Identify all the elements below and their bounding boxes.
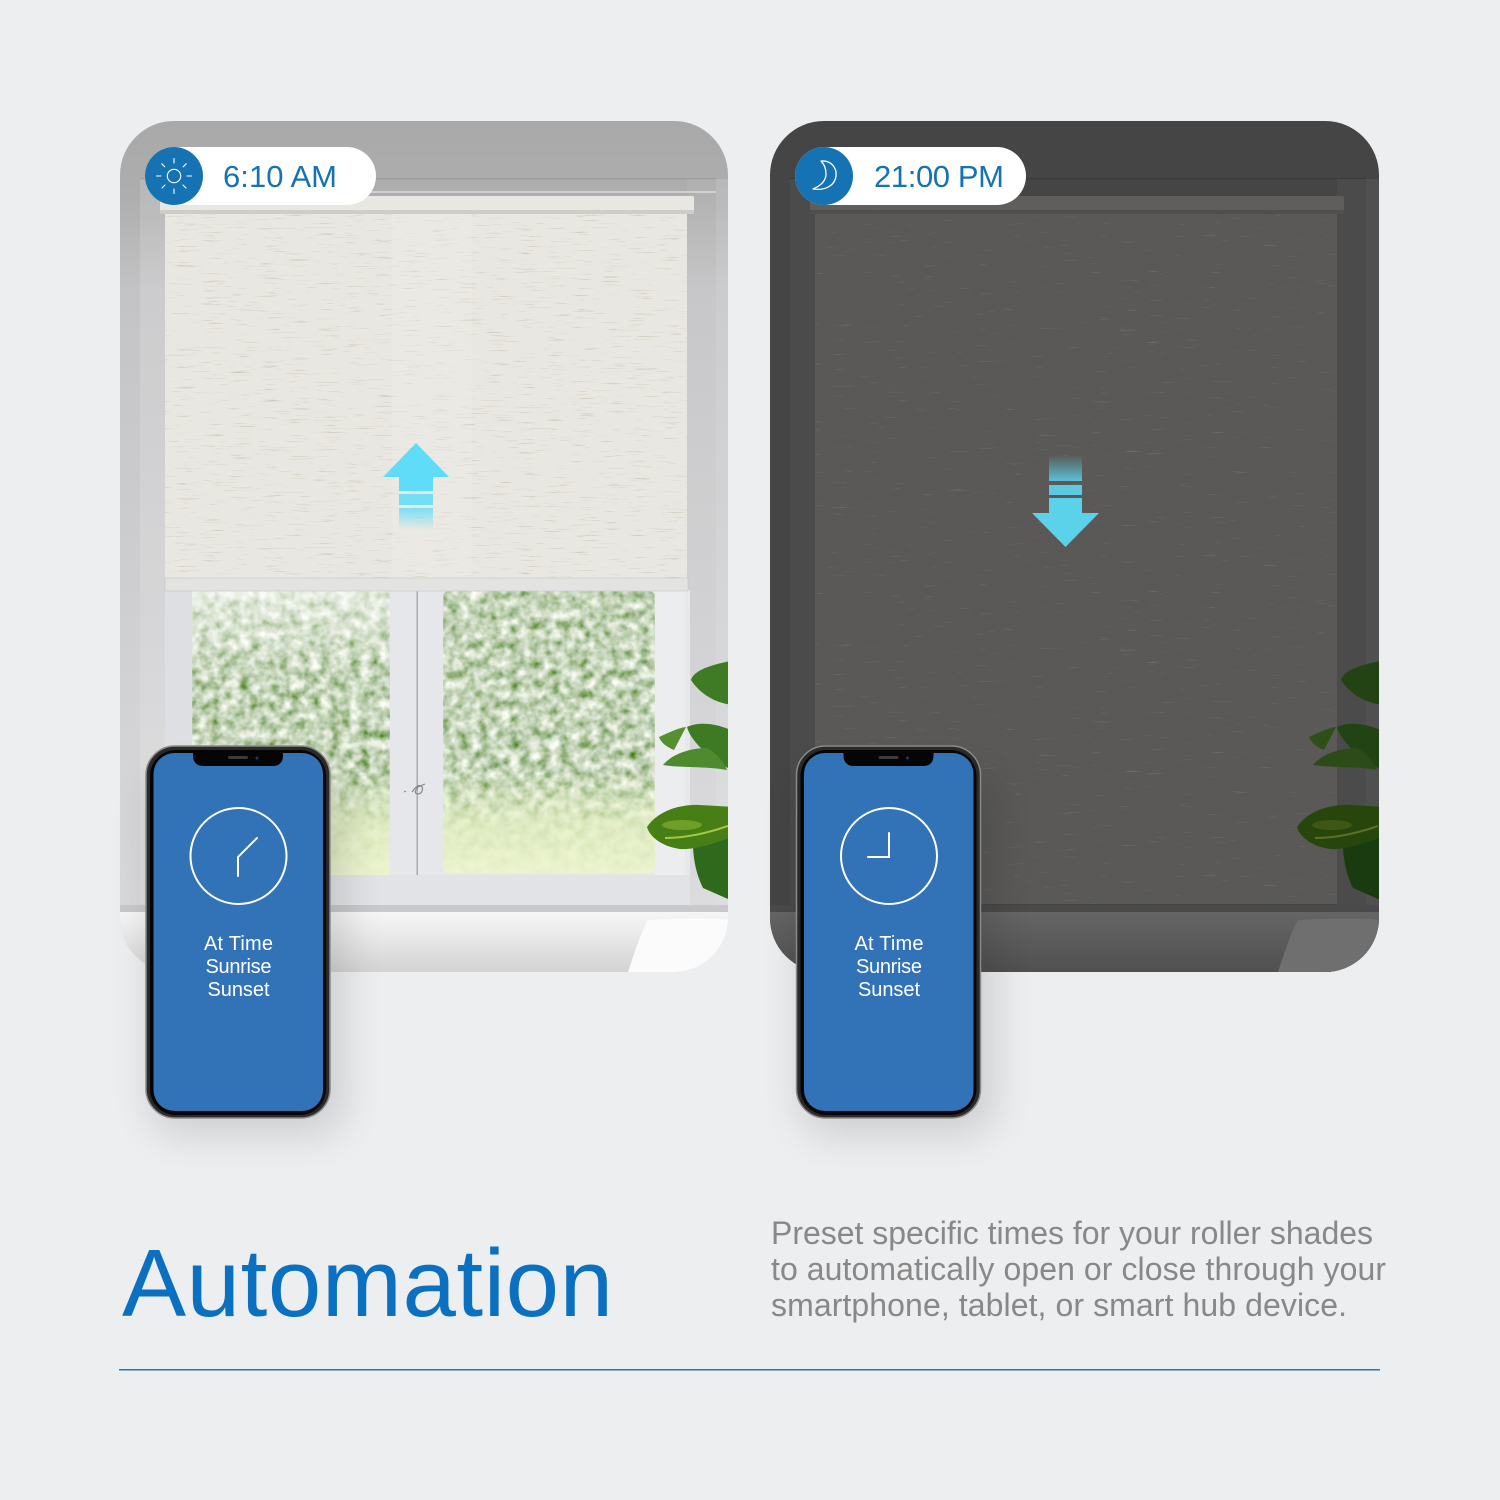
garden view left pane <box>192 591 390 875</box>
phone: morning schedule <box>146 746 330 1118</box>
schedule options <box>854 933 924 1001</box>
schedule options: Sunset <box>858 979 920 1001</box>
window sill <box>120 912 730 972</box>
icon: sun <box>145 147 203 205</box>
arrow: shade rising <box>383 443 449 530</box>
icon: clock <box>190 808 286 904</box>
schedule options: Sunrise <box>856 956 922 978</box>
window frame <box>120 178 728 916</box>
phone: evening schedule <box>796 746 980 1118</box>
title: Automation <box>122 1230 613 1337</box>
window latch <box>404 784 425 794</box>
phone shadows <box>150 775 995 1135</box>
icon: moon <box>795 147 853 205</box>
schedule options: At Time <box>204 933 273 955</box>
panel: morning window scene <box>120 121 735 972</box>
roller shade fabric <box>815 212 1337 904</box>
description <box>771 1215 1386 1323</box>
schedule options: Sunset <box>208 979 270 1001</box>
schedule options <box>204 933 273 1001</box>
roller cassette <box>160 191 716 214</box>
window sill <box>770 912 1380 972</box>
plant leaves <box>1297 660 1385 902</box>
badge: morning time <box>145 147 376 205</box>
description: smartphone, tablet, or smart hub device. <box>771 1287 1347 1323</box>
schedule options: At Time <box>854 933 924 955</box>
garden view right pane <box>443 591 655 875</box>
time label: 21:00 PM <box>874 159 1004 194</box>
roller shade fabric <box>165 212 687 590</box>
time label: 6:10 AM <box>223 159 337 194</box>
icon: clock <box>841 808 937 904</box>
panel: evening window scene <box>770 121 1385 972</box>
schedule options: Sunrise <box>206 956 272 978</box>
arrow: shade lowering <box>1032 455 1099 547</box>
shade bottom bar <box>165 578 688 591</box>
description: to automatically open or close through your <box>771 1251 1386 1287</box>
plant leaves <box>647 660 735 902</box>
window frame <box>770 178 1379 912</box>
roller cassette <box>810 196 1344 214</box>
badge: evening time <box>795 147 1026 205</box>
description: Preset specific times for your roller shades <box>771 1215 1373 1251</box>
